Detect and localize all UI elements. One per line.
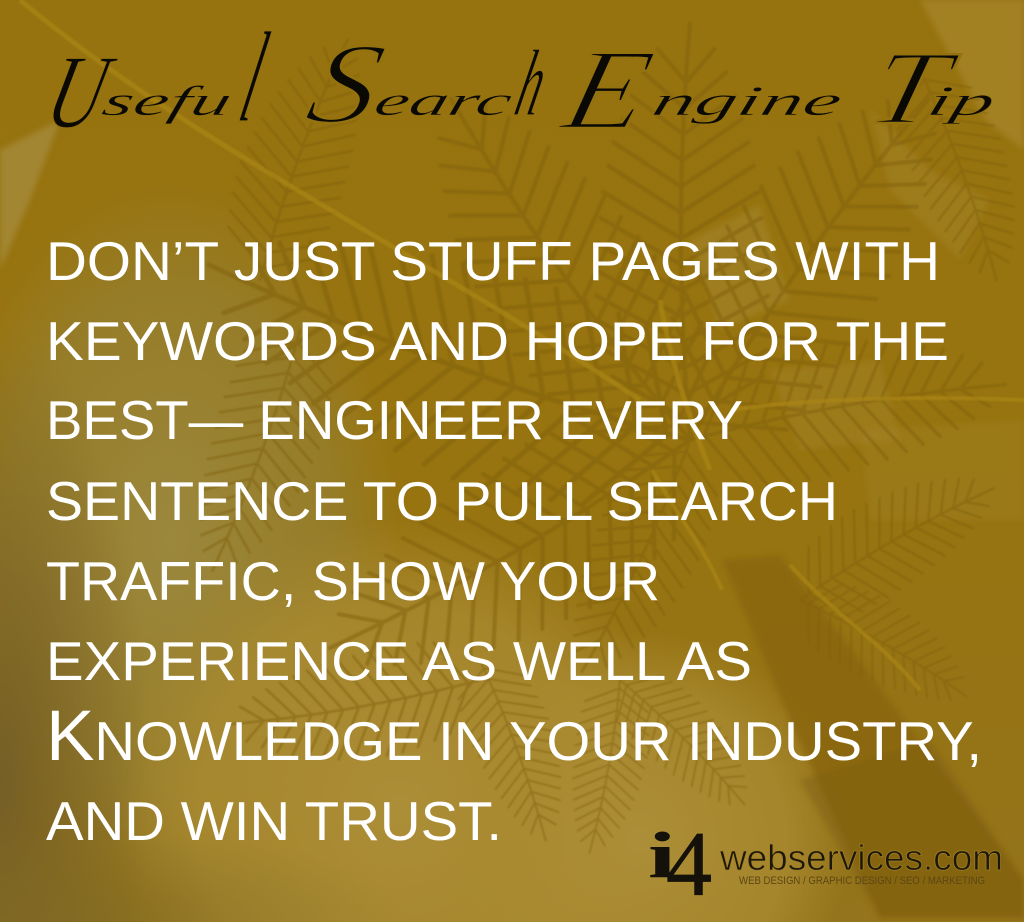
title: Useful Search Engine Tip: earc xyxy=(370,79,517,125)
main tip text: KNOWLEDGE IN YOUR INDUSTRY, xyxy=(46,697,982,776)
title: Useful Search Engine Tip: h xyxy=(507,30,557,136)
logo: i4 webservices.com xyxy=(648,813,1003,915)
hazy sky at left and bottom xyxy=(0,180,850,922)
title: Useful Search Engine Tip: l xyxy=(229,5,279,150)
title: Useful Search Engine Tip: S xyxy=(296,21,396,148)
palm rib highlights xyxy=(20,0,1024,690)
main tip text: SENTENCE TO PULL SEARCH xyxy=(46,470,838,532)
logo wordmark: webservices.com xyxy=(719,837,1003,878)
palm fronds, dark xyxy=(167,19,1024,860)
palm trunk xyxy=(722,555,1024,918)
logo mark i: i xyxy=(648,819,676,892)
main tip text: DON’T JUST STUFF PAGES WITH xyxy=(46,230,940,292)
title: Useful Search Engine Tip: ip xyxy=(923,79,1000,125)
title: Useful Search Engine Tip: T xyxy=(858,30,967,147)
title: Useful Search Engine Tip: ngine xyxy=(648,79,847,125)
logo tagline: WEB DESIGN / GRAPHIC DESIGN / SEO / MARKETING xyxy=(739,875,985,887)
logo mark 4: 4 xyxy=(666,813,712,915)
main tip text: BEST— ENGINEER EVERY xyxy=(46,389,743,451)
main tip text xyxy=(46,230,982,852)
main tip text: AND WIN TRUST. xyxy=(46,790,502,852)
title: Useful Search Engine Tip: E xyxy=(550,27,664,154)
title: Useful Search Engine Tip: sefu xyxy=(98,79,237,125)
main tip text: EXPERIENCE AS WELL AS xyxy=(46,630,752,692)
main tip text: KEYWORDS AND HOPE FOR THE xyxy=(46,310,949,372)
main tip text: TRAFFIC, SHOW YOUR xyxy=(46,550,660,612)
title: Useful Search Engine Tip: U xyxy=(36,34,124,151)
